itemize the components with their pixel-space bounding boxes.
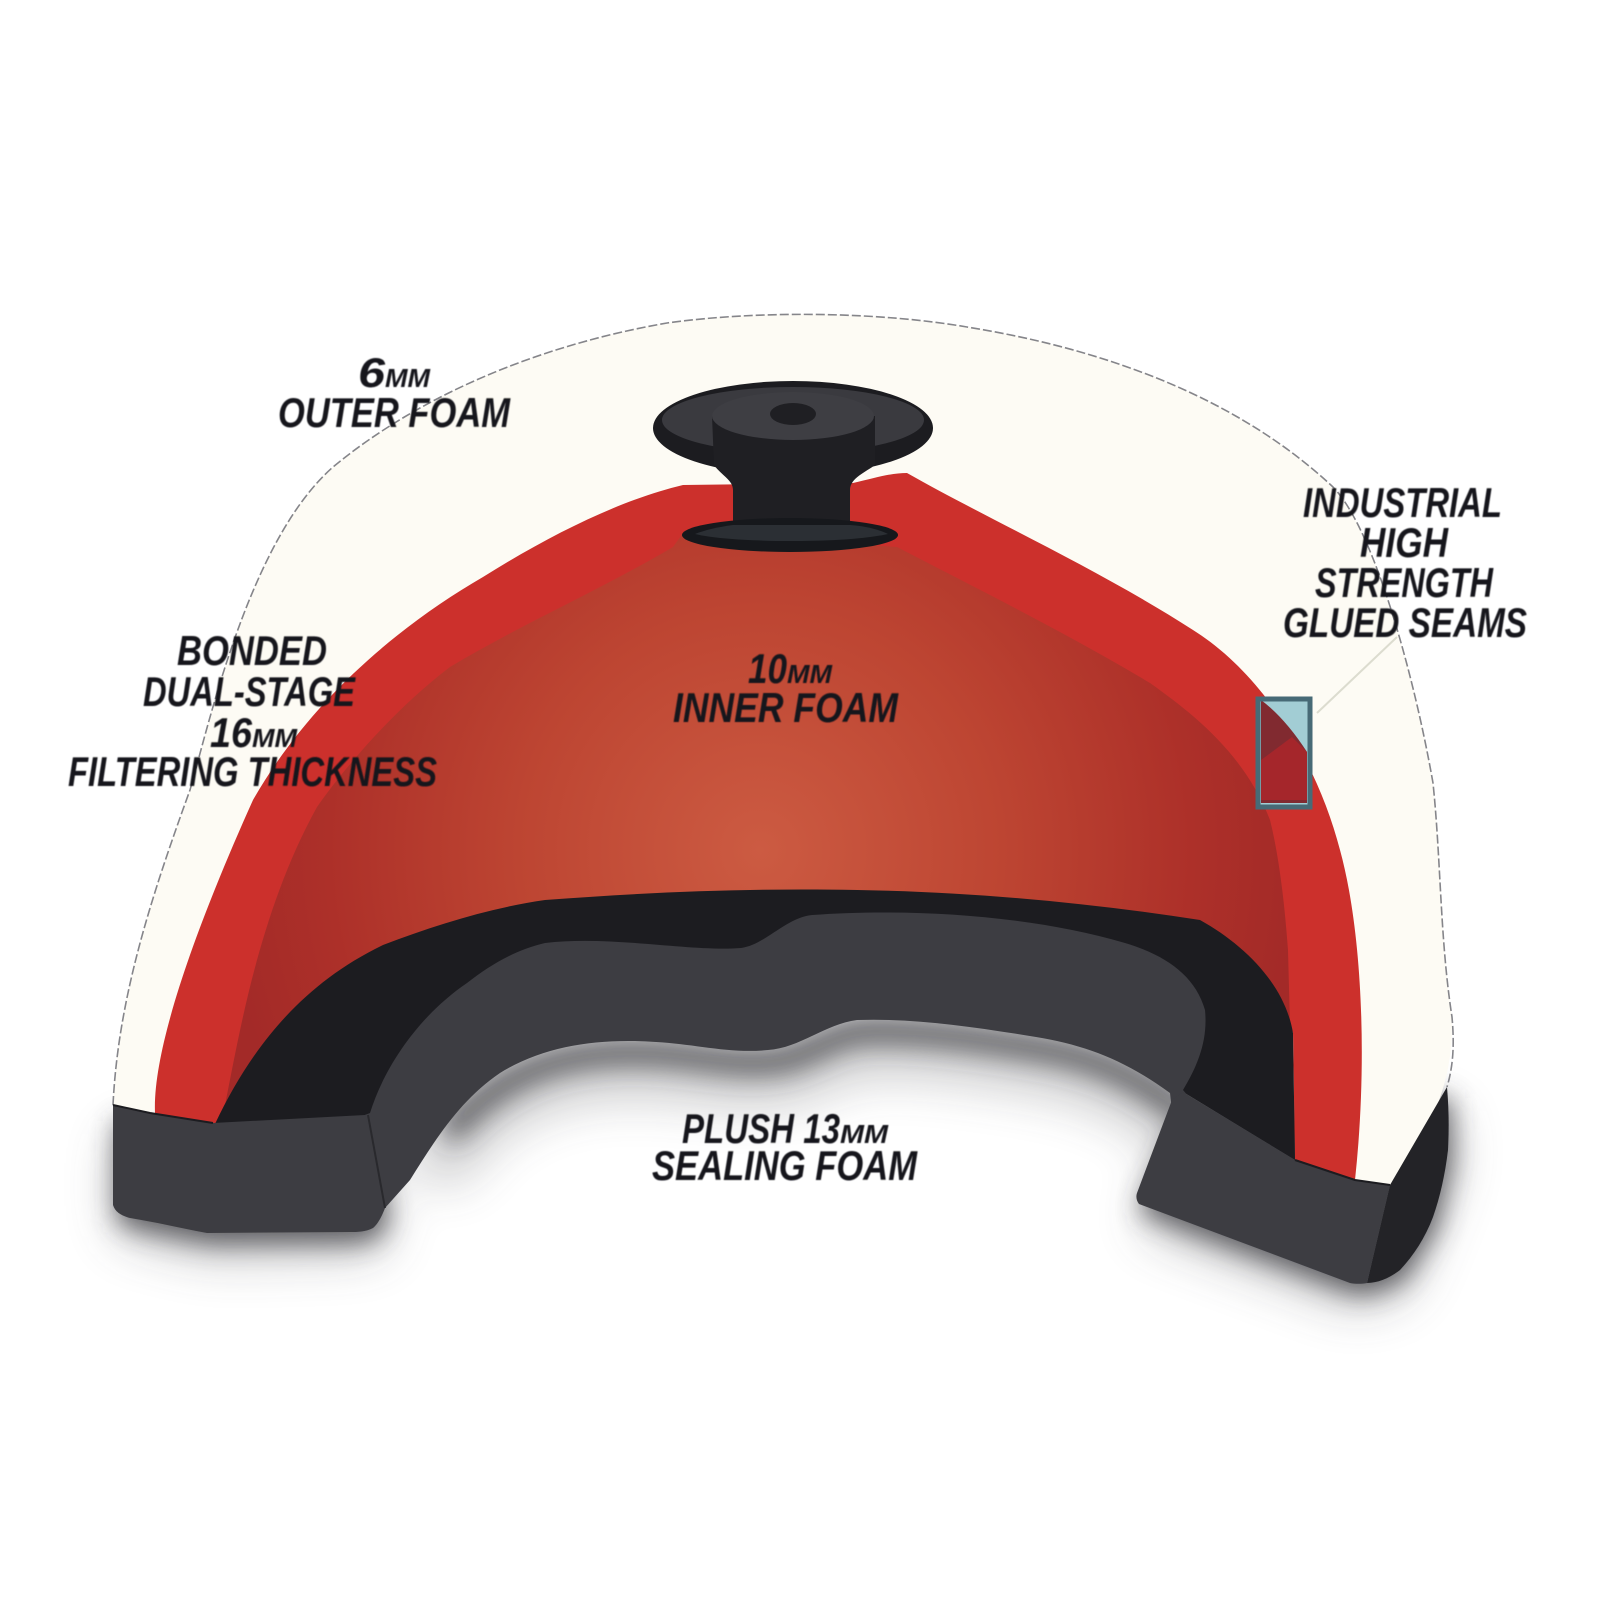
- drop shadow under foam: [117, 1031, 1452, 1307]
- top edge line: [1295, 1160, 1390, 1185]
- label: plush 13mm sealing foam: [652, 1105, 918, 1189]
- left block face: [113, 1105, 385, 1233]
- label: bonded dual-stage 16mm filtering thickness: FILTERING THICKNESS: [68, 748, 437, 795]
- black foam backing: [215, 889, 1295, 1160]
- label: 10mm inner foam: 10: [748, 645, 787, 692]
- wide soft shadow: [117, 1044, 1452, 1307]
- label: 10mm inner foam: INNER FOAM: [673, 684, 899, 731]
- red foam band: cut edge of inner foam: [155, 473, 1362, 1180]
- upper disk surface: [662, 387, 924, 453]
- stem body: [712, 416, 875, 530]
- label: 6mm outer foam: MM: [385, 363, 431, 393]
- label: industrial high strength glued seams: STRENGTH: [1315, 559, 1494, 606]
- block top edge: [113, 1105, 213, 1123]
- lower flange: [682, 518, 898, 552]
- label: 6mm outer foam: OUTER FOAM: [278, 389, 511, 436]
- label: industrial high strength glued seams: GLUED SEAMS: [1283, 599, 1527, 646]
- callout: seam detail box with leader line: [1258, 637, 1397, 807]
- label: 10mm inner foam: [673, 645, 899, 731]
- center hole: [770, 403, 816, 425]
- outer foam shell: 6mm cream layer: [113, 314, 1452, 1185]
- leader line: [1317, 637, 1397, 713]
- stem top: [712, 392, 874, 440]
- right foam block end: [1136, 1087, 1449, 1284]
- outer foam dashed outline: [113, 314, 1453, 1105]
- label: bonded dual-stage 16mm filtering thickness: BONDED: [177, 627, 327, 674]
- label: plush 13mm sealing foam: SEALING FOAM: [652, 1142, 918, 1189]
- block corner seam: [368, 1115, 385, 1208]
- label: 6mm outer foam: 6: [358, 349, 386, 396]
- right side shaded face: [1367, 1087, 1449, 1283]
- label: bonded dual-stage 16mm filtering thickness: 16: [210, 709, 253, 756]
- icon: black valve stud: [653, 381, 933, 552]
- label: 6mm outer foam: [278, 349, 511, 436]
- label: industrial high strength glued seams: [1283, 479, 1527, 646]
- flange highlight: [695, 525, 888, 541]
- label: bonded dual-stage 16mm filtering thickness: [68, 627, 437, 795]
- label: bonded dual-stage 16mm filtering thickness: DUAL-STAGE: [143, 668, 357, 715]
- lower seam tint: [1261, 737, 1307, 800]
- label: plush 13mm sealing foam: MM: [840, 1119, 889, 1149]
- label: industrial high strength glued seams: INDUSTRIAL: [1303, 479, 1502, 526]
- tight contact shadow: [117, 1031, 1452, 1294]
- label: 10mm inner foam: MM: [787, 659, 833, 689]
- upper seam tint: [1261, 700, 1307, 803]
- box outline: [1258, 699, 1310, 807]
- right block face: [1136, 1092, 1390, 1284]
- plush sealing foam: gray band: [362, 912, 1206, 1208]
- label: plush 13mm sealing foam: PLUSH 13: [682, 1105, 840, 1152]
- left foam block end: [113, 1105, 385, 1233]
- inner foam surface with radial shading: [225, 533, 1292, 1105]
- light blue background: [1258, 699, 1310, 807]
- label: industrial high strength glued seams: HIGH: [1360, 519, 1449, 566]
- label: bonded dual-stage 16mm filtering thickness: MM: [252, 723, 298, 753]
- upper disk rim: [653, 381, 933, 475]
